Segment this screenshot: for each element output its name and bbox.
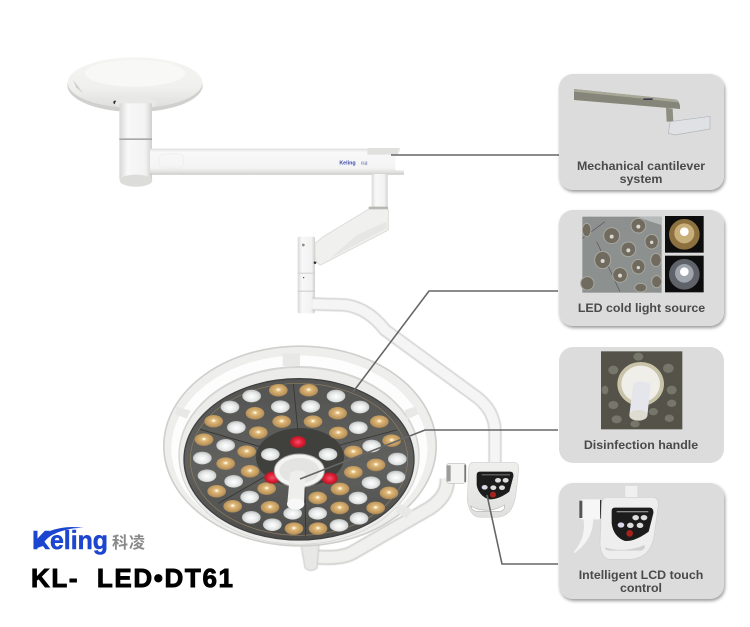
leader line: control <box>487 495 558 564</box>
ceiling mount and cantilever arm <box>67 57 404 313</box>
horizontal arm: Keling <box>339 160 356 166</box>
leader line: cantilever <box>391 154 559 156</box>
label: Disinfection handle <box>584 438 698 452</box>
model name title: KL- LED•DT61 <box>31 563 233 593</box>
vertical joint <box>298 237 316 313</box>
control panel <box>447 462 519 517</box>
warm LEDs <box>195 384 401 535</box>
red LEDs <box>264 436 338 484</box>
photo: warm LED <box>665 216 704 253</box>
photo: control panel <box>574 486 658 559</box>
lower yoke arm <box>301 478 447 570</box>
column <box>115 97 156 187</box>
logo swoosh <box>34 527 84 549</box>
white LEDs <box>193 390 407 532</box>
photo: arm <box>574 89 710 135</box>
swivel knob <box>447 463 466 483</box>
label: system <box>620 172 662 186</box>
panel: LED cold light source <box>559 210 724 326</box>
label: Mechanical cantilever <box>577 159 705 173</box>
horizontal arm <box>150 148 404 175</box>
leader line: handle <box>300 430 558 479</box>
operating lamp head <box>163 345 437 547</box>
panel: disinfection handle <box>559 347 724 463</box>
panel: mechanical cantilever system <box>559 74 724 190</box>
photo: white LED <box>665 256 704 292</box>
photo: handle <box>601 351 682 429</box>
lower pipe and folding joint <box>315 174 388 265</box>
handle body <box>467 462 519 517</box>
logo wordmark: Keling <box>32 525 108 555</box>
label: LED cold light source <box>578 301 705 315</box>
central handle <box>274 454 324 510</box>
outer ring <box>163 345 437 547</box>
curved support arm <box>312 304 495 466</box>
ceiling plate <box>67 57 203 112</box>
leader line: LED <box>353 291 558 392</box>
touch screen <box>477 472 513 499</box>
LED panel <box>183 378 415 541</box>
logo chinese name: 科凌 <box>112 534 145 552</box>
label: Intelligent LCD touch <box>579 568 703 582</box>
label: control <box>620 581 662 595</box>
brand logo <box>32 525 145 555</box>
panel: intelligent LCD touch control <box>559 483 724 599</box>
photo: LED close-up <box>581 217 662 293</box>
horizontal arm: 科凌 <box>361 160 368 165</box>
